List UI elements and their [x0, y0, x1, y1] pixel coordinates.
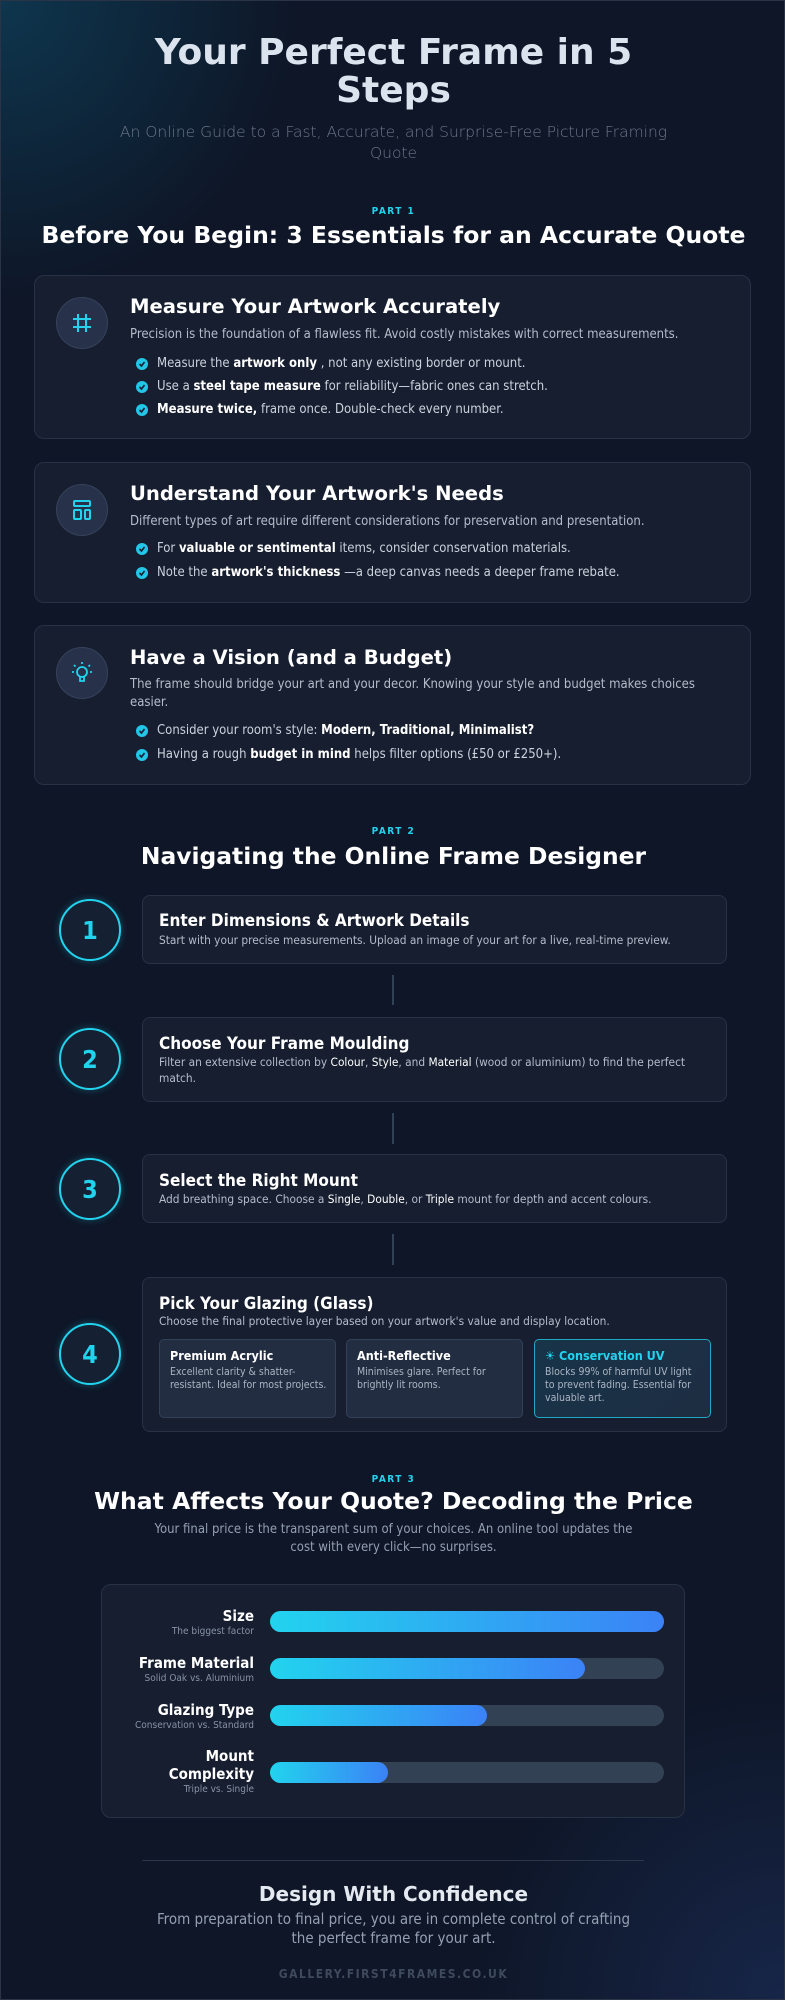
- number circle: 1: [82, 916, 98, 944]
- heading: Understand Your Artwork's Needs: [130, 482, 504, 505]
- bar chart: Triple vs. Single: [184, 1784, 254, 1795]
- arrow: connector: [392, 1234, 394, 1265]
- glazing: acrylic: Premium Acrylic: [170, 1348, 273, 1363]
- part 3 intro: Your final price is the transparent sum of your choices. An online tool updates the cost with every click—no surprises.: [155, 1522, 632, 1555]
- step box: Pick Your Glazing (Glass): [159, 1294, 373, 1314]
- step box: Choose Your Frame Moulding: [159, 1034, 409, 1054]
- glazing: conservation UV: ☀ Conservation UV: [545, 1348, 664, 1363]
- closing text: From preparation to final price, you are in complete control of crafting the perfect frame for your art.: [157, 1910, 630, 1947]
- title: [154, 32, 632, 111]
- step 4: [55, 1277, 727, 1432]
- bar chart: Glazing Type: [158, 1701, 254, 1719]
- part 2 label: PART 2: [372, 826, 415, 837]
- panel: needs: [34, 462, 751, 603]
- glazing: acrylic: [159, 1339, 336, 1418]
- bullet: Note the —a deep canvas needs a deeper frame rebate.: [157, 565, 620, 580]
- bullet: [136, 723, 534, 738]
- glazing: conservation UV: Blocks 99% of harmful UV light to prevent fading. Essential for valuable art.: [545, 1366, 692, 1404]
- bullet: artwork's thickness: [211, 565, 340, 580]
- bullet: Measure the , not any existing border or mount.: [157, 356, 526, 371]
- icon: layout: [56, 484, 108, 536]
- bar: glazing: [135, 1701, 664, 1731]
- step box: [142, 1154, 727, 1223]
- number circle: [59, 1028, 121, 1090]
- bullet: Consider your room's style:: [157, 723, 317, 738]
- bar chart: Solid Oak vs. Aluminium: [145, 1673, 254, 1684]
- description: Precision is the foundation of a flawless fit. Avoid costly mistakes with correct measurements.: [130, 327, 678, 342]
- number circle: [59, 899, 121, 961]
- footer: GALLERY.FIRST4FRAMES.CO.UK: [279, 1967, 508, 1981]
- number circle: 3: [82, 1174, 98, 1204]
- bar chart: Conservation vs. Standard: [135, 1720, 254, 1731]
- heading: Have a Vision (and a Budget): [130, 646, 452, 669]
- bar chart: Frame Material: [139, 1654, 254, 1672]
- bar: mount: [169, 1747, 664, 1795]
- bar: frame material: [139, 1654, 664, 1684]
- bullet: valuable or sentimental: [179, 541, 336, 556]
- description: Different types of art require different considerations for preservation and presentation.: [130, 514, 645, 529]
- part 1 label: PART 1: [372, 206, 415, 217]
- step box: Select the Right Mount: [159, 1171, 358, 1191]
- part 3 label: PART 3: [372, 1474, 415, 1485]
- part 2 heading: Navigating the Online Frame Designer: [141, 842, 646, 870]
- bar chart: Size: [223, 1607, 254, 1625]
- title: Your Perfect Frame in 5: [155, 32, 632, 73]
- panel: measure: [34, 275, 751, 439]
- step box: [142, 1277, 727, 1432]
- step box: [142, 895, 727, 964]
- part 3 heading: What Affects Your Quote? Decoding the Price: [94, 1487, 693, 1515]
- arrow: connector: [392, 975, 394, 1005]
- bullet: steel tape measure: [193, 379, 321, 394]
- step box: Filter an extensive collection by Colour, Style, and Material (wood or aluminium) to find the perfect match.: [159, 1055, 685, 1084]
- glazing: conservation UV: [534, 1339, 711, 1418]
- step 1: [55, 895, 727, 964]
- bar chart: Complexity: [169, 1765, 254, 1783]
- glazing: anti-reflective: Anti-Reflective: [357, 1348, 451, 1363]
- step box: Choose the final protective layer based on your artwork's value and display location.: [159, 1314, 610, 1328]
- number circle: 4: [82, 1340, 98, 1368]
- bullet: Having a rough helps filter options (£50 or £250+).: [157, 747, 561, 762]
- step box: [142, 1017, 727, 1102]
- bar chart: The biggest factor: [172, 1626, 254, 1637]
- bar chart: [101, 1584, 685, 1818]
- glazing: anti-reflective: Minimises glare. Perfect for brightly lit rooms.: [357, 1366, 486, 1391]
- bullet: [136, 402, 504, 417]
- subtitle: An Online Guide to a Fast, Accurate, and Surprise-Free Picture Framing Quote: [120, 123, 667, 162]
- title: Steps: [336, 70, 451, 111]
- part 1 heading: Before You Begin: 3 Essentials for an Accurate Quote: [42, 221, 746, 249]
- arrow: connector: [392, 1113, 394, 1144]
- step box: Start with your precise measurements. Upload an image of your art for a live, real-time preview.: [159, 933, 671, 947]
- bullet: frame once. Double-check every number.: [261, 402, 504, 417]
- number circle: [59, 1323, 121, 1385]
- bullet: artwork only: [233, 356, 317, 371]
- number circle: [59, 1158, 121, 1220]
- icon: grid: [56, 297, 108, 349]
- step box: Enter Dimensions & Artwork Details: [159, 911, 470, 931]
- glazing: anti-reflective: [346, 1339, 523, 1418]
- bullet: For items, consider conservation materials.: [157, 541, 571, 556]
- bullet: budget in mind: [250, 747, 351, 762]
- description: The frame should bridge your art and your decor. Knowing your style and budget makes choices easier.: [130, 677, 695, 710]
- bar chart: Mount: [206, 1747, 254, 1765]
- heading: Measure Your Artwork Accurately: [130, 295, 500, 318]
- number circle: 2: [82, 1044, 98, 1074]
- step box: Add breathing space. Choose a Single, Double, or Triple mount for depth and accent colours.: [159, 1192, 652, 1206]
- panel: vision: [34, 625, 751, 785]
- icon: bulb: [56, 647, 108, 699]
- bullet: Measure twice,: [157, 402, 257, 417]
- closing heading: Design With Confidence: [259, 1882, 528, 1906]
- step 2: [55, 1017, 727, 1102]
- glazing: acrylic: Excellent clarity & shatter-resistant. Ideal for most projects.: [170, 1366, 326, 1391]
- bullet: Use a for reliability—fabric ones can stretch.: [157, 379, 548, 394]
- bar: size: [172, 1607, 664, 1637]
- bullet: Modern, Traditional, Minimalist?: [321, 723, 534, 738]
- step 3: [55, 1154, 727, 1224]
